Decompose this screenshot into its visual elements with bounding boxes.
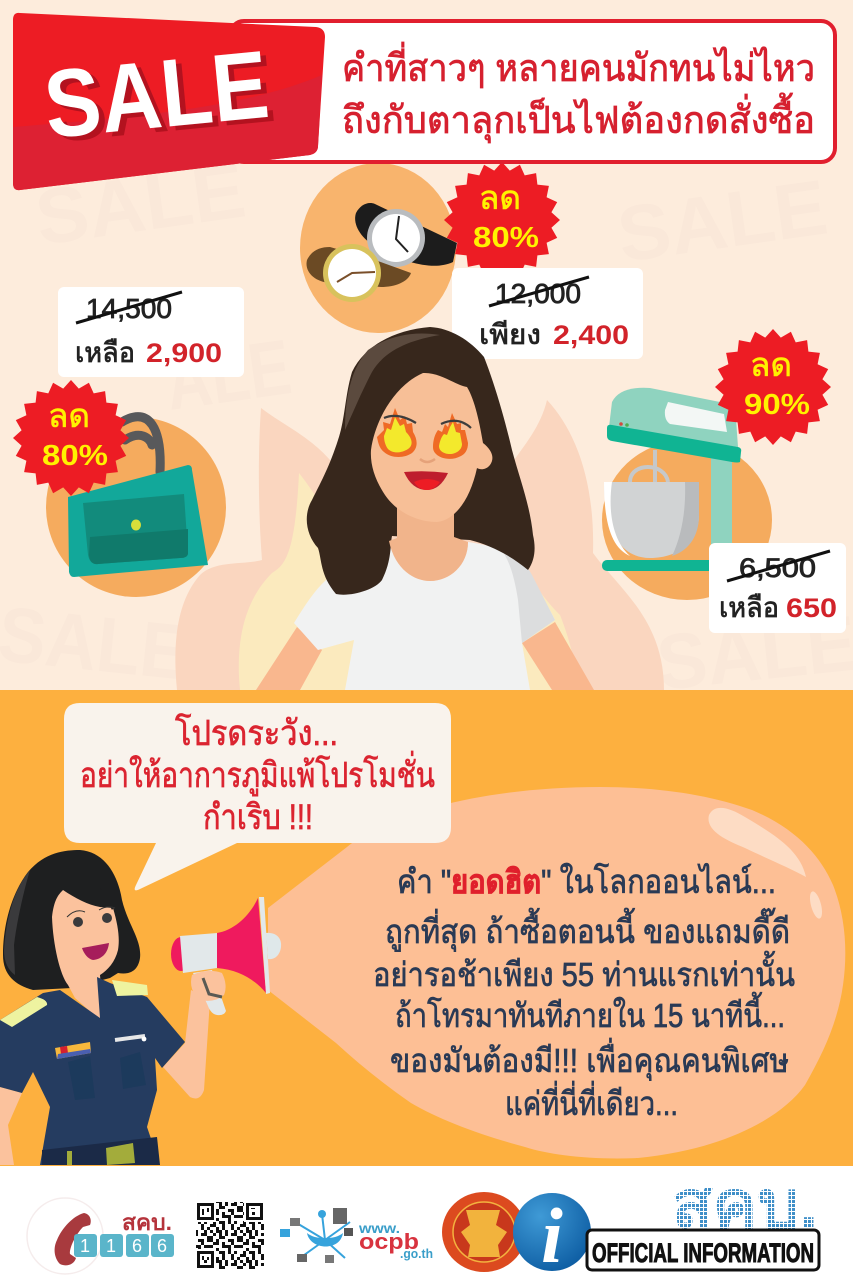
price tag: watches: เพียง [479, 319, 541, 350]
body text: popular online phrases: ถูกที่สุด ถ้าซื้อตอนนี้ ของแถมดี๊ดี [385, 907, 790, 952]
flaming eye right [433, 413, 468, 459]
price tag: bag [58, 287, 244, 377]
highlight in hair [345, 333, 440, 430]
shirt [294, 541, 555, 690]
footer logo: QR code [196, 1202, 264, 1269]
price tag: mixer: 6,500 [739, 553, 816, 583]
face [371, 373, 492, 522]
face [52, 890, 119, 1020]
price tag: mixer: 650 [786, 593, 837, 623]
footer logo: official information stamp [587, 1167, 819, 1270]
epaulets [0, 997, 47, 1027]
price tag: bag: 2,900 [146, 338, 222, 368]
background: top section [0, 0, 853, 690]
discount badge: watches 80%: ลด [479, 179, 521, 216]
footer strip [0, 1166, 853, 1280]
hair [3, 850, 140, 990]
icon: teal handbag [68, 417, 208, 577]
footer logo: ocpb website: www. [358, 1220, 400, 1236]
warning speech bubble: กำเริบ !!! [203, 798, 313, 837]
discount badge: mixer 90%: ลด [750, 346, 792, 383]
footer logo: ocpb website [280, 1208, 433, 1263]
price tag: mixer [709, 543, 846, 633]
price tag: watches: 2,400 [553, 320, 629, 350]
warning speech bubble: โปรดระวัง... [175, 713, 338, 753]
watermark SALE words: SALE [612, 162, 832, 279]
discount badge: watches 80%: 80% [473, 222, 539, 254]
belt [42, 1137, 160, 1165]
eyes [73, 917, 83, 927]
body text: popular online phrases: แค่ที่นี่ที่เดียว... [505, 1081, 678, 1122]
discount badge: bag 80%: ลด [48, 397, 90, 434]
product circle: watches [300, 163, 457, 333]
ribbons [55, 1042, 91, 1059]
price tag: mixer: เหลือ [719, 592, 779, 623]
header: red SALE banner: SALE [46, 35, 279, 163]
footer logo: hotline 1166: สคบ. [122, 1210, 172, 1235]
icon: stand mixer [602, 388, 741, 571]
warning speech bubble: อย่าให้อาการภูมิแพ้โปรโมชั่น [80, 751, 435, 796]
watermark SALE words: SALE [0, 589, 192, 697]
product circle: mixer [602, 388, 772, 600]
uniform [0, 977, 185, 1165]
discount badge: mixer 90% [715, 329, 831, 445]
megaphone [171, 897, 281, 1015]
footer logo: hotline 1166: 1 [106, 1236, 116, 1256]
footer logo: consumer protection seal [442, 1192, 526, 1272]
name bar [115, 1036, 145, 1040]
icon: brown watch [307, 244, 411, 302]
balloon highlights [708, 808, 806, 877]
illustration: flames behind woman [175, 400, 664, 690]
watermark SALE words: SALE [30, 145, 250, 262]
nose [420, 459, 435, 462]
discount badge: bag 80%: 80% [42, 440, 108, 472]
header: red SALE banner: SALE [40, 31, 273, 159]
icon: black watch [355, 203, 457, 267]
right arm [163, 990, 210, 1098]
footer logo: information icon: i [541, 1192, 563, 1279]
neck [389, 500, 468, 581]
background: orange section [0, 690, 853, 1166]
footer logo: official information stamp: สคบ. [672, 1167, 818, 1241]
mouth [404, 471, 448, 490]
watermark SALE words: ALE [160, 322, 296, 427]
price tag: watches: 12,000 [495, 278, 581, 309]
woman with fire eyes [256, 327, 594, 690]
mouth [82, 943, 109, 960]
body text: popular online phrases: ถ้าโทรมาทันทีภายใน 15 นาทีนี้... [395, 992, 785, 1034]
footer logo: ocpb website: ocpb [359, 1229, 419, 1254]
arms [256, 622, 594, 690]
price tag: watches [452, 268, 643, 359]
eyebrows [384, 416, 471, 428]
left arm [0, 1087, 22, 1165]
flaming eye left [377, 408, 417, 457]
footer logo: hotline 1166: 6 [157, 1236, 167, 1256]
header: speech strip with title lines [230, 21, 835, 162]
header: red SALE banner [13, 13, 325, 190]
footer logo: hotline 1166: 6 [132, 1236, 142, 1256]
hand [191, 971, 226, 1001]
discount badge: bag 80% [13, 380, 129, 496]
body text: popular online phrases [373, 863, 795, 1122]
footer logo: hotline 1166: 1 [80, 1236, 90, 1256]
uniform pockets [68, 1052, 146, 1100]
footer logo: information icon [513, 1192, 591, 1279]
large speech balloon from megaphone [268, 787, 845, 1158]
officer with megaphone [0, 850, 281, 1165]
footer logo: hotline 1166 [27, 1198, 174, 1274]
body text: popular online phrases: ของมันต้องมี!!! เพื่อคุณคนพิเศษ [390, 1038, 789, 1081]
price tag: bag: เหลือ [75, 337, 135, 368]
header: speech strip with title lines: คำที่สาวๆ หลายคนมักทนไม่ไหว [342, 42, 815, 90]
body text: popular online phrases: อย่ารอช้าเพียง 55 ท่านแรกเท่านั้น [373, 951, 795, 993]
discount badge: watches 80% [444, 162, 560, 278]
discount badge: mixer 90%: 90% [744, 389, 810, 421]
product circle: bag [46, 417, 226, 597]
header: speech strip with title lines: ถึงกับตาลุกเป็นไฟต้องกดสั่งซื้อ [342, 92, 815, 143]
price tag: bag: 14,500 [86, 293, 172, 324]
footer logo: ocpb website: .go.th [400, 1246, 433, 1261]
body text: popular online phrases: คำ "ยอดฮิต" ในโลกออนไลน์... [397, 863, 776, 900]
watermark SALE words [0, 145, 853, 707]
hair [307, 327, 535, 595]
warning speech bubble [64, 703, 451, 890]
